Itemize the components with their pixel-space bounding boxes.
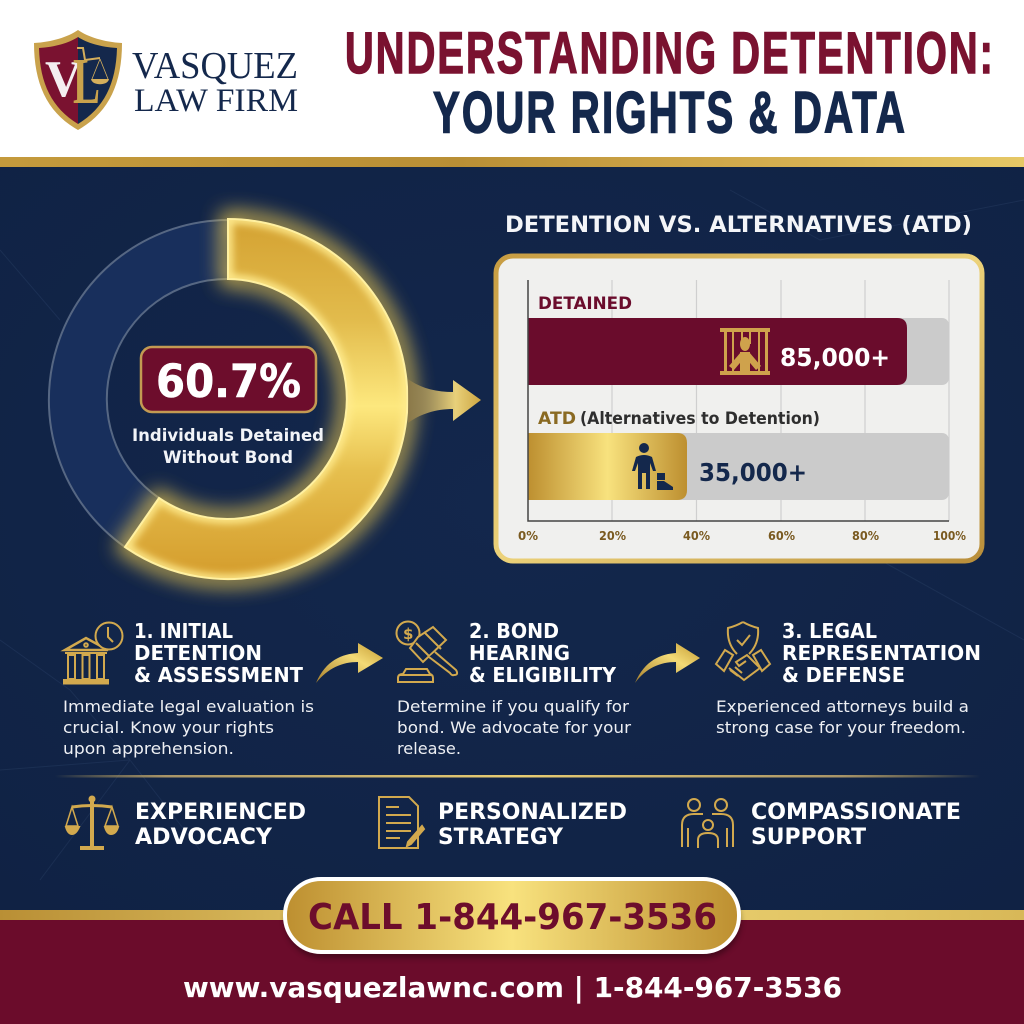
feature: personalized strategy bbox=[379, 797, 627, 850]
donut bright outline bbox=[125, 219, 407, 579]
step 1 heading: DETENTION bbox=[134, 641, 262, 665]
phone number: CALL 1-844-967-3536 bbox=[308, 897, 717, 938]
donut chart: 60.7 percent detained without bond bbox=[49, 219, 407, 579]
x axis labels: 60% bbox=[768, 529, 795, 543]
x axis labels: 0% bbox=[518, 529, 538, 543]
feature 3 text bbox=[751, 800, 961, 850]
feature 1 text: ADVOCACY bbox=[135, 825, 273, 850]
step 1 description bbox=[63, 697, 314, 758]
feature 3 text: COMPASSIONATE bbox=[751, 800, 961, 825]
icon: courthouse and clock bbox=[64, 622, 122, 684]
detained bar bbox=[528, 318, 907, 385]
atd bar track bbox=[528, 433, 949, 500]
step 3 description: strong case for your freedom. bbox=[716, 718, 966, 737]
footer maroon band bbox=[0, 920, 1024, 1024]
icon: shield: L bbox=[73, 45, 100, 118]
step 1 heading: 1. INITIAL bbox=[134, 619, 233, 643]
icon: document with pen bbox=[379, 797, 424, 848]
divider rule bbox=[55, 775, 980, 778]
step 3 description bbox=[716, 697, 969, 737]
icon: shield: V bbox=[45, 51, 82, 108]
x axis labels: 20% bbox=[599, 529, 626, 543]
feature 3 text: SUPPORT bbox=[751, 825, 866, 850]
logo: Vasquez Law Firm bbox=[34, 30, 298, 130]
donut caption: Without Bond bbox=[163, 448, 293, 468]
step 2 description bbox=[397, 697, 631, 758]
x axis labels: 40% bbox=[683, 529, 710, 543]
step 1: initial detention and assessment bbox=[63, 619, 314, 758]
logo wordmark: VASQUEZ bbox=[132, 45, 298, 87]
step 1 heading bbox=[134, 619, 303, 687]
title bbox=[345, 21, 995, 146]
icon: gavel and dollar coin: $ bbox=[403, 625, 413, 643]
step 1 description: crucial. Know your rights bbox=[63, 718, 274, 737]
x axis labels: 100% bbox=[933, 529, 966, 543]
step 2 description: release. bbox=[397, 739, 461, 758]
logo wordmark bbox=[132, 45, 298, 119]
chart card bbox=[496, 256, 982, 561]
footer contact line: www.vasquezlawnc.com | 1-844-967-3536 bbox=[183, 971, 842, 1004]
percent badge: 60.7% bbox=[156, 355, 301, 408]
label: atd: ATD bbox=[538, 409, 576, 428]
step 3 heading: REPRESENTATION bbox=[782, 641, 981, 665]
icon: person with ankle monitor bbox=[632, 443, 673, 490]
x axis labels: 80% bbox=[852, 529, 879, 543]
feature 2 text: STRATEGY bbox=[438, 825, 564, 850]
step 1 heading: & ASSESSMENT bbox=[134, 663, 303, 687]
grid lines bbox=[612, 280, 949, 521]
arrow: donut to chart bbox=[408, 379, 481, 423]
donut glow bbox=[125, 219, 407, 579]
step 3 heading: & DEFENSE bbox=[782, 663, 905, 687]
button shadow bbox=[285, 884, 741, 958]
axes bbox=[528, 280, 949, 521]
detained bar track bbox=[528, 318, 949, 385]
donut caption bbox=[132, 426, 324, 468]
step 2 heading: & ELIGIBILITY bbox=[469, 663, 617, 687]
feature 1 text: EXPERIENCED bbox=[135, 800, 306, 825]
donut gold segment bbox=[125, 219, 407, 579]
feature 2 text: PERSONALIZED bbox=[438, 800, 627, 825]
label: detained: DETAINED bbox=[538, 294, 632, 313]
label: atd: (Alternatives to Detention) bbox=[580, 409, 820, 428]
feature 2 text bbox=[438, 800, 627, 850]
bar chart panel bbox=[496, 256, 982, 561]
feature: experienced advocacy bbox=[66, 796, 306, 850]
logo wordmark: LAW FIRM bbox=[134, 83, 298, 119]
step 1 description: Immediate legal evaluation is bbox=[63, 697, 314, 716]
step 2 description: Determine if you qualify for bbox=[397, 697, 629, 716]
donut remaining track bbox=[49, 220, 228, 547]
header top gold band bbox=[0, 157, 1024, 167]
arrow: step 1 to step 2 bbox=[316, 643, 383, 683]
step 2 description: bond. We advocate for your bbox=[397, 718, 631, 737]
feature 1 text bbox=[135, 800, 306, 850]
icon: family bbox=[682, 799, 733, 848]
icon: shield bbox=[34, 30, 122, 130]
icon: shield and handshake bbox=[716, 622, 770, 680]
arrow: step 2 to step 3 bbox=[635, 643, 700, 683]
step 2 heading: 2. BOND bbox=[469, 619, 559, 643]
value: 85,000+: 85,000+ bbox=[780, 343, 890, 372]
donut inner rim glow bbox=[125, 219, 407, 579]
donut caption: Individuals Detained bbox=[132, 426, 324, 446]
step 1 description: upon apprehension. bbox=[63, 739, 234, 758]
feature: compassionate support bbox=[682, 799, 961, 850]
footer gold line bbox=[0, 910, 1024, 920]
atd bar bbox=[528, 433, 687, 500]
step 3 heading: 3. LEGAL bbox=[782, 619, 877, 643]
step 3: legal representation and defense bbox=[716, 619, 981, 737]
x axis labels bbox=[518, 529, 966, 543]
step 2 heading: HEARING bbox=[469, 641, 570, 665]
step 3 heading bbox=[782, 619, 981, 687]
chart heading: DETENTION VS. ALTERNATIVES (ATD) bbox=[505, 213, 972, 238]
value: 35,000+: 35,000+ bbox=[699, 458, 807, 487]
button pill bbox=[285, 879, 739, 952]
icon: scales of justice bbox=[66, 796, 118, 848]
call to action button bbox=[285, 879, 741, 958]
step 2: bond hearing and eligibility bbox=[396, 619, 631, 758]
icon: gavel and dollar coin bbox=[396, 622, 457, 682]
navy main panel bbox=[0, 165, 1024, 915]
step 3 description: Experienced attorneys build a bbox=[716, 697, 969, 716]
icon: person behind bars bbox=[720, 328, 770, 375]
step 2 heading bbox=[469, 619, 617, 687]
